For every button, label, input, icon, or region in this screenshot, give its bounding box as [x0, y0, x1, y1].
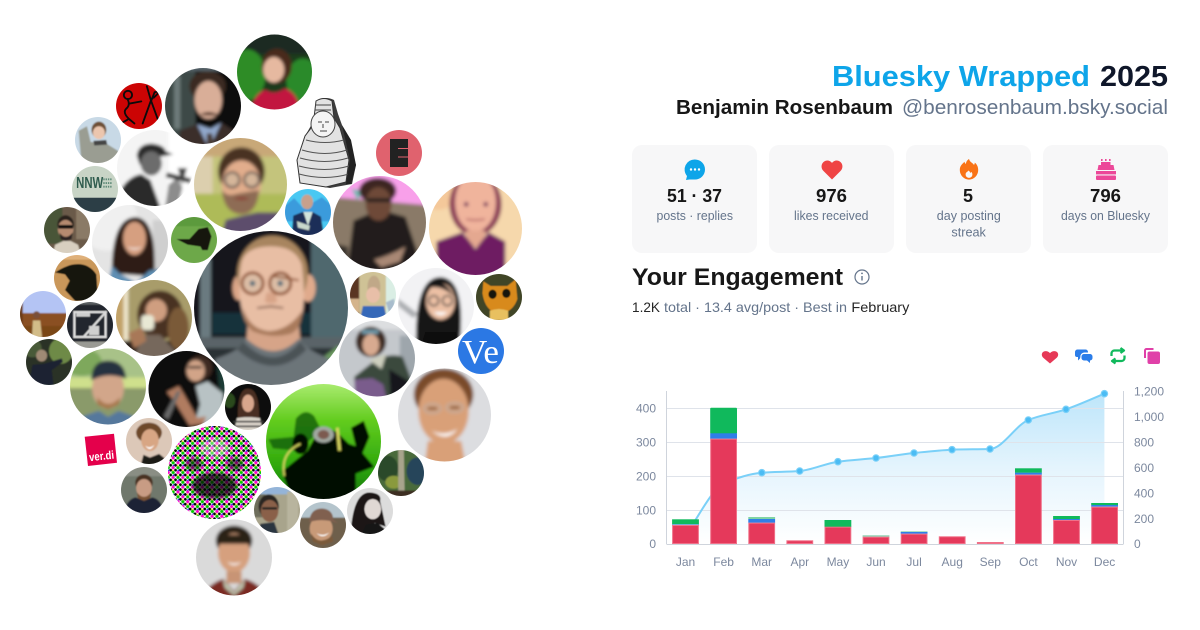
avatar: Asian woman with glasses [398, 268, 474, 344]
avatar: man with black sweater at pink wall [333, 176, 426, 269]
avatar: man with hooded jacket [121, 467, 167, 513]
avatar: black dog on grass [171, 217, 217, 263]
stat card: days on Bluesky: 796 [1090, 186, 1121, 206]
cumulative area [686, 394, 1104, 544]
blue reply segments [672, 433, 1118, 534]
engagement summary [632, 299, 909, 315]
month labels: Sep [980, 555, 1001, 569]
stat card: likes received [769, 145, 894, 253]
avatar: E logo [376, 130, 422, 176]
avatar: child with blue shirt [350, 272, 396, 318]
icon: flame [960, 159, 978, 180]
stat card: posts and replies [632, 145, 757, 253]
month labels: Aug [942, 555, 963, 569]
avatar: smiling woman with long hair [92, 205, 168, 281]
avatar: Ve logo [458, 328, 504, 374]
stat card: day posting streak: streak [951, 226, 987, 240]
left axis labels: 0 [649, 537, 656, 551]
stat card: day posting streak: day posting [937, 209, 1001, 223]
month labels: Apr [790, 555, 809, 569]
engagement summary: 1.2K [632, 299, 661, 315]
avatar: woman in striped shirt [225, 384, 271, 430]
avatar: man speaking into microphone, dark stage [148, 351, 224, 427]
icon: birthday cake [1096, 159, 1116, 180]
avatar: no-sign poster [67, 302, 113, 348]
right axis labels: 600 [1134, 461, 1154, 475]
month labels: Nov [1056, 555, 1077, 569]
month labels: Oct [1019, 555, 1038, 569]
logo: ver.di [85, 434, 117, 466]
icon: statue engraving [297, 98, 356, 188]
stat card: likes received: likes received [794, 209, 869, 223]
stat card: posts and replies: posts · replies [656, 209, 733, 223]
avatar: man with cap and microphone [117, 130, 192, 206]
avatar: smiling man at whiteboard [398, 368, 491, 462]
icon: replies [1075, 350, 1092, 363]
avatar: red stick figures [116, 83, 162, 129]
avatar: woman with plaid and sunglasses on head [339, 320, 415, 396]
icon: chat bubble [685, 159, 705, 180]
line points [759, 390, 1108, 476]
month labels: Dec [1094, 555, 1115, 569]
avatar: NNW logo: NNW [76, 174, 104, 192]
avatar: man with sunglasses [44, 207, 90, 253]
logo: ver.di: ver.di [89, 450, 115, 464]
month labels: Jul [906, 555, 922, 569]
month labels: Jun [866, 555, 886, 569]
avatar: black and white woman [347, 488, 393, 534]
icon: info [855, 270, 869, 284]
avatar: NNW logo [72, 166, 118, 212]
icon: heart [822, 161, 842, 180]
avatar: man in cap at lake [70, 348, 146, 424]
right axis labels [1134, 384, 1164, 551]
stat card: day posting streak [906, 145, 1031, 253]
chart: monthly engagement bars with cumulative line [636, 384, 1164, 569]
right axis labels: 0 [1134, 537, 1141, 551]
avatar: man in red sweater [196, 520, 272, 596]
avatar: smiling man with curly hair [126, 418, 172, 464]
cumulative line [686, 394, 1104, 535]
avatar: diver in green water [266, 384, 381, 499]
engagement summary: total · 13.4 avg/post · Best in [664, 299, 847, 315]
green repost segments [672, 408, 1118, 537]
right axis labels: 1,000 [1134, 410, 1164, 424]
avatar: moustached man [165, 68, 241, 144]
avatar: woman with mug [116, 280, 192, 356]
user name: Benjamin Rosenbaum [676, 97, 893, 119]
right axis labels: 400 [1134, 486, 1154, 500]
avatar: man in blue suit [285, 189, 331, 235]
avatar: man with glasses by rock [254, 487, 300, 533]
month labels [676, 555, 1115, 569]
right axis labels: 200 [1134, 512, 1154, 526]
avatar: crow [54, 255, 100, 301]
avatar: main portrait, man with round glasses [194, 231, 348, 385]
title: Bluesky Wrapped [832, 61, 1090, 93]
stat card: days on Bluesky [1043, 145, 1168, 253]
left axis labels: 300 [636, 436, 656, 450]
avatar: person in forest [26, 339, 72, 385]
stat card: days on Bluesky: days on Bluesky [1061, 209, 1151, 223]
left axis labels [636, 402, 656, 551]
chart legend [1042, 348, 1160, 364]
avatar: woman in purple, warm tones [429, 182, 522, 275]
avatar: orange cat [476, 274, 522, 320]
right axis labels: 800 [1134, 436, 1154, 450]
avatar: speaker under blue sky [20, 291, 66, 337]
right axis labels: 1,200 [1134, 384, 1164, 398]
icon: reposts [1112, 348, 1124, 364]
month labels: Jan [676, 555, 695, 569]
left axis labels: 400 [636, 402, 656, 416]
month labels: May [827, 555, 849, 569]
stat card: day posting streak: 5 [963, 186, 973, 206]
month labels: Feb [713, 555, 734, 569]
user handle: @benrosenbaum.bsky.social [902, 97, 1168, 119]
title: 2025 [1100, 61, 1168, 93]
stat card: likes received: 976 [816, 186, 847, 206]
stat card: posts and replies: 51 · 37 [667, 186, 722, 206]
avatar: halftone portrait [168, 426, 261, 519]
avatar: man in knit sweater [75, 117, 121, 163]
red like segments [673, 439, 1118, 544]
avatar: Ve logo: Ve [462, 334, 499, 371]
icon: likes [1042, 351, 1058, 364]
heading: your engagement: Your Engagement [632, 264, 843, 291]
avatar: woman in red among leaves [237, 34, 312, 110]
engagement summary: February [851, 299, 909, 315]
avatar: man in brown cap [300, 502, 346, 548]
left axis labels: 100 [636, 504, 656, 518]
icon: quotes [1145, 349, 1160, 364]
avatar cluster [15, 27, 531, 603]
avatar: man with glasses and beard [194, 138, 287, 231]
month labels: Mar [751, 555, 772, 569]
avatar: tall trees in forest [378, 450, 424, 496]
left axis labels: 200 [636, 470, 656, 484]
